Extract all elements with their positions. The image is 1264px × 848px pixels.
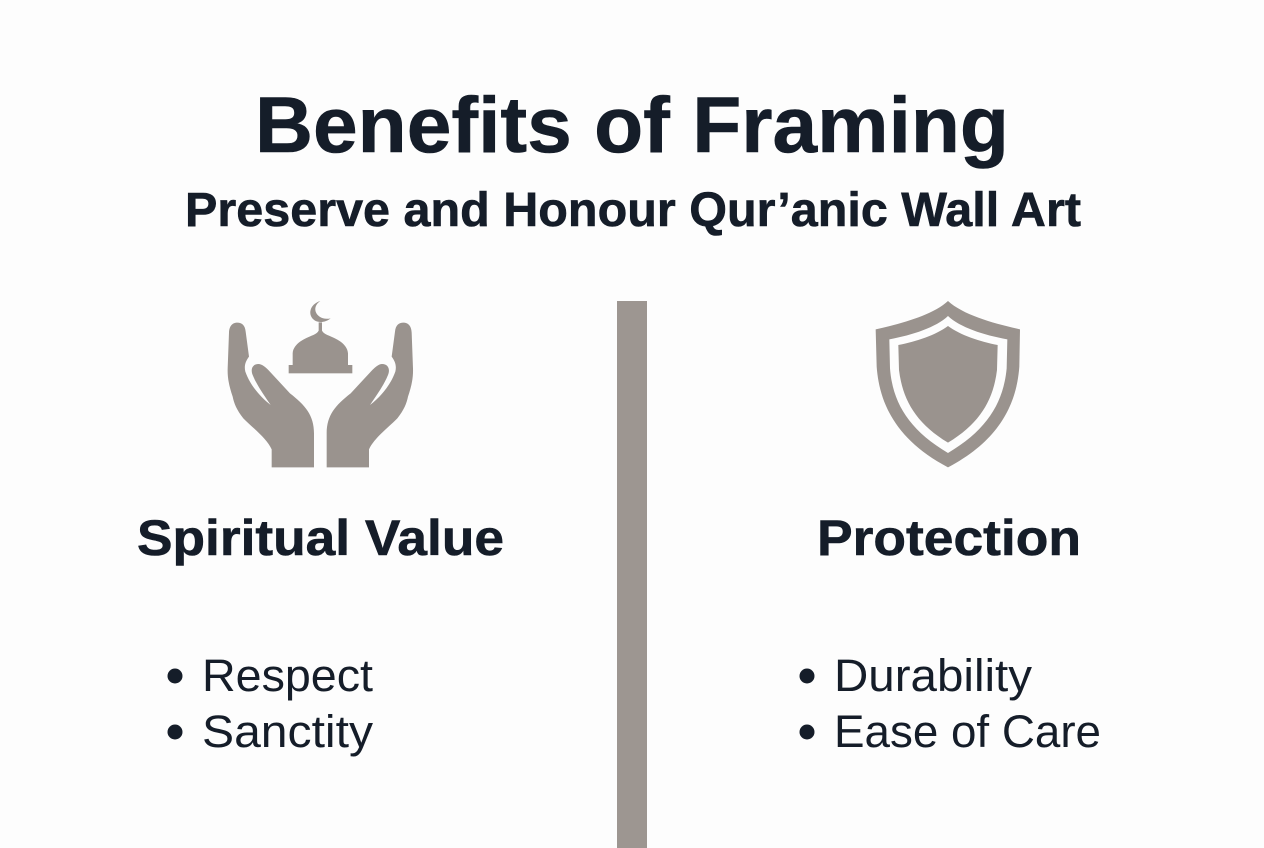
title: Benefits of Framing bbox=[255, 80, 1009, 169]
icon: hands holding mosque dome bbox=[228, 301, 413, 467]
bullet list: spiritual value: Sanctity bbox=[202, 706, 374, 757]
bullet list: protection bbox=[800, 650, 1101, 757]
bullet list: spiritual value: Respect bbox=[202, 650, 374, 701]
bullet list: protection: Durability bbox=[834, 650, 1033, 701]
vertical divider bbox=[617, 301, 647, 848]
heading: protection: Protection bbox=[817, 510, 1081, 566]
icon: shield bbox=[876, 301, 1020, 467]
bullet list: protection: Ease of Care bbox=[834, 706, 1101, 757]
heading: spiritual value: Spiritual Value bbox=[137, 510, 504, 566]
subtitle: Preserve and Honour Qur’anic Wall Art bbox=[185, 184, 1081, 237]
bullet list: spiritual value bbox=[168, 650, 374, 757]
panel: spiritual value bbox=[137, 301, 504, 757]
panel: protection bbox=[800, 301, 1101, 757]
